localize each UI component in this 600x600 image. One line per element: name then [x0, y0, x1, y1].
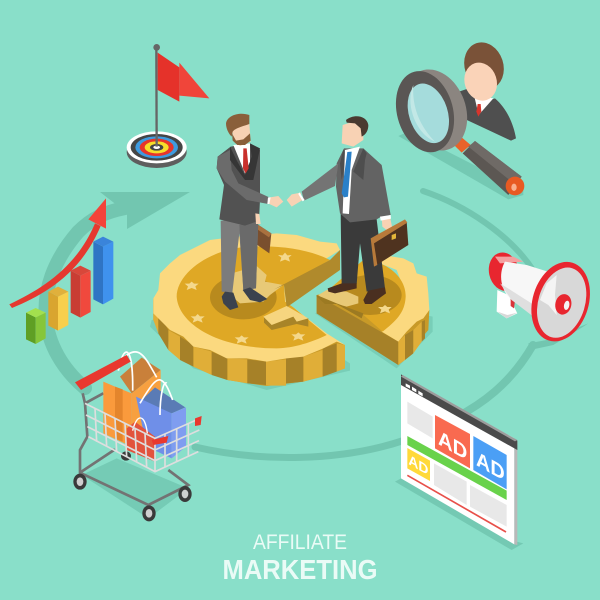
orange bag: [103, 352, 161, 447]
briefcase right: [374, 222, 408, 267]
web page with ads: [395, 374, 523, 550]
head: [342, 121, 363, 147]
wire basket: [85, 403, 200, 472]
coin and businessmen: [150, 114, 433, 390]
text lines: [407, 402, 507, 527]
page header: [401, 374, 517, 450]
trousers: [341, 213, 385, 292]
bell: [522, 255, 599, 349]
hands: [287, 193, 392, 231]
right rim: [380, 255, 429, 342]
briefcase left: [256, 223, 271, 253]
red bag: [127, 418, 155, 462]
right puzzle: [318, 290, 358, 307]
title line 2: MARKETING: [222, 554, 378, 585]
glass shadow: [398, 132, 523, 199]
green banner: [407, 436, 507, 500]
glass handle: [454, 137, 471, 153]
small tab: [264, 313, 308, 330]
coin rim: [153, 233, 345, 362]
red line: [407, 475, 506, 532]
shopping cart: [73, 352, 202, 521]
megaphone stand: [497, 290, 517, 318]
circular arrow shadow: [46, 191, 533, 457]
right inner face: [318, 260, 406, 332]
page shadow: [395, 478, 523, 550]
head: [232, 123, 251, 146]
ad yellow: AD: [408, 452, 428, 479]
left businessman: [217, 114, 283, 310]
right coin piece: [317, 255, 429, 365]
puzzle tab raised: [228, 266, 283, 303]
bell shadow: [528, 323, 588, 350]
ad blue: [473, 436, 507, 489]
jacket: [336, 148, 391, 222]
wheels: [73, 451, 192, 521]
left coin piece: [153, 233, 345, 386]
flag: [179, 63, 209, 98]
ad red: [435, 415, 470, 468]
target and flag: [127, 44, 209, 168]
magnifying glass: [387, 60, 524, 199]
trousers: [221, 219, 258, 293]
coin shadow: [150, 300, 433, 390]
growth bar chart with arrow: [9, 198, 113, 344]
shirt and tie: [233, 143, 250, 173]
head: [458, 37, 510, 95]
rear cap: [485, 250, 523, 294]
green bar: [26, 308, 46, 344]
title: [222, 531, 378, 585]
target: [127, 136, 187, 168]
page sheet: [401, 375, 514, 544]
yellow bar: [48, 287, 68, 331]
megaphone: [485, 250, 599, 350]
blue bag: [136, 380, 186, 458]
cart handle: [75, 355, 202, 445]
ad blue: AD: [476, 446, 505, 486]
bust: [456, 87, 516, 141]
shoes: [328, 283, 386, 304]
coin inner face: [177, 246, 330, 348]
person icon: [456, 37, 516, 141]
flag pole: [153, 48, 160, 147]
ad red: AD: [438, 425, 467, 465]
cart frame: [80, 393, 188, 513]
cut wall: [274, 250, 340, 307]
shoes: [222, 287, 267, 310]
megaphone body: [501, 262, 553, 317]
red growth arrow: [9, 223, 101, 308]
title line 1: AFFILIATE: [253, 531, 347, 554]
hands: [255, 196, 283, 224]
blue bar: [93, 237, 113, 304]
handle cap: [506, 177, 524, 195]
stars: [185, 253, 305, 344]
glass ring: [392, 60, 478, 160]
cart shadow: [82, 458, 188, 518]
shirt and tie: [343, 147, 360, 214]
red bar: [71, 266, 91, 318]
jacket: [217, 143, 260, 226]
lens: [400, 78, 456, 148]
right businessman: [287, 116, 408, 304]
